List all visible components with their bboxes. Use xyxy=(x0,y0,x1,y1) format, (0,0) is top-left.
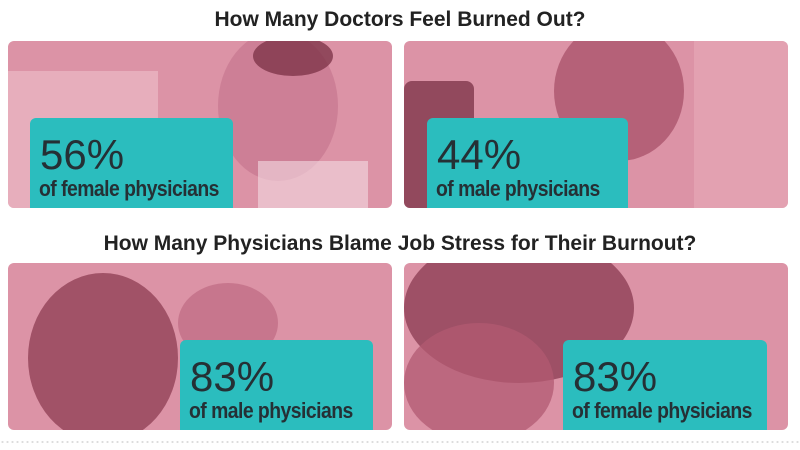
callout: 83% male xyxy=(180,340,373,430)
panel: male job stress xyxy=(8,263,392,430)
callout: 83% male: 83% xyxy=(190,353,274,400)
callout: 56% xyxy=(30,118,233,208)
callout: 83% female xyxy=(563,340,767,430)
callout: 83% female: of female physicians xyxy=(572,398,752,423)
panel: male burnout xyxy=(404,41,788,208)
callout: 56%: of female physicians xyxy=(39,176,219,201)
callout: 83% female: 83% xyxy=(573,353,657,400)
panel: female burnout xyxy=(8,41,392,208)
callout: 83% male: of male physicians xyxy=(189,398,353,423)
callout: 44%: 44% xyxy=(437,131,521,178)
panel: female job stress xyxy=(404,263,788,430)
callout: 44%: of male physicians xyxy=(436,176,600,201)
title: top: How Many Doctors Feel Burned Out? xyxy=(214,8,586,31)
title: bottom: How Many Physicians Blame Job Stress for Their Burnout? xyxy=(104,232,696,255)
decorative dotted strip xyxy=(0,440,800,444)
callout: 44% xyxy=(427,118,628,208)
callout: 56%: 56% xyxy=(40,131,124,178)
